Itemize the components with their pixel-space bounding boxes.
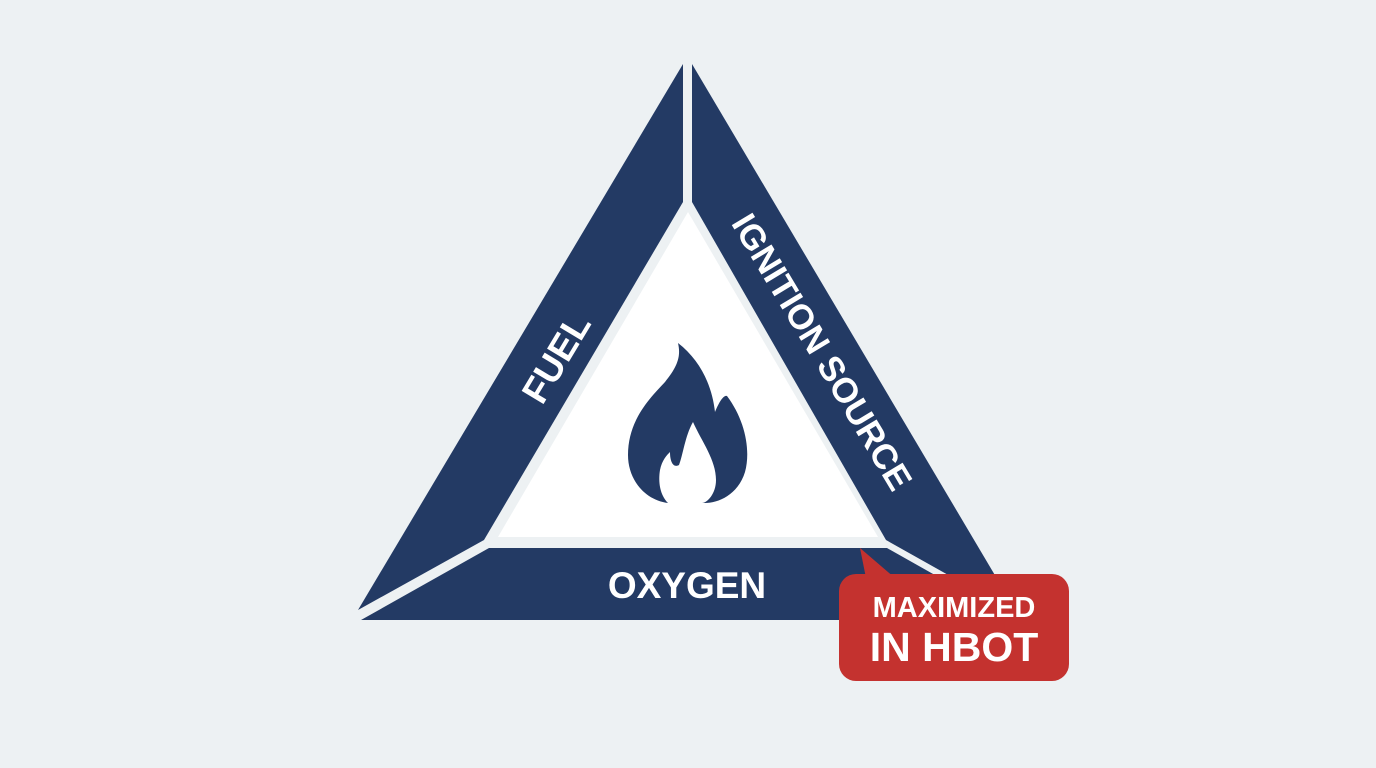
callout: maximized in HBOT: IN HBOT [870, 624, 1038, 670]
callout: maximized in HBOT: MAXIMIZED [873, 592, 1035, 624]
icon: flame [628, 343, 747, 503]
inner white triangle [498, 212, 878, 537]
panel: fuel side [358, 64, 683, 610]
label: fuel: FUEL [514, 306, 599, 410]
panel: oxygen side [361, 548, 965, 620]
fire triangle diagram [358, 64, 996, 620]
label: ignition source: IGNITION SOURCE [724, 207, 919, 497]
panel: ignition source side [692, 64, 996, 577]
label: oxygen: OXYGEN [608, 565, 766, 606]
callout: maximized in HBOT [839, 548, 1069, 681]
